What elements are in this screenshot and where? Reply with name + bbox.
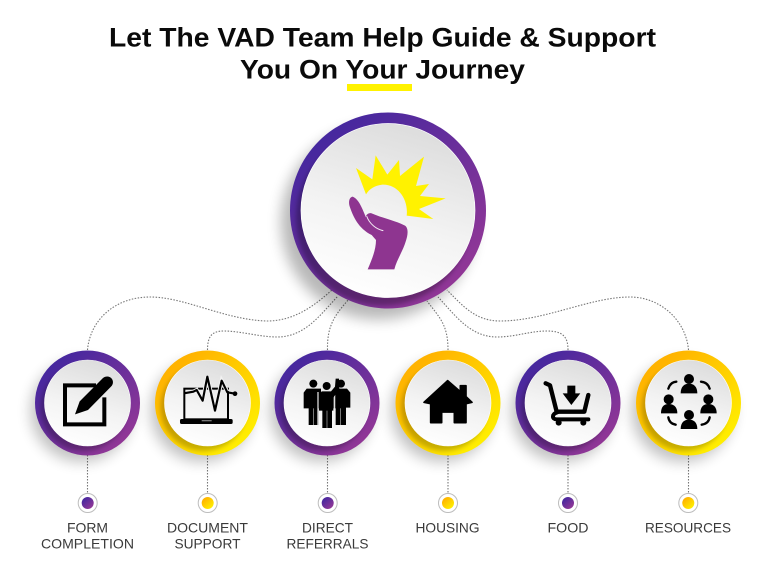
label: document support: SUPPORT xyxy=(174,535,241,551)
label: food: FOOD xyxy=(548,519,588,535)
label: direct referrals: DIRECT xyxy=(302,519,353,535)
title xyxy=(109,22,656,84)
label: form completion: COMPLETION xyxy=(41,535,134,551)
icon: laptop with pulse line xyxy=(180,377,237,424)
icon: hand holding sun xyxy=(349,155,446,269)
icon: shopping cart with down arrow xyxy=(546,383,588,426)
icon: house xyxy=(424,381,472,423)
badge: document support xyxy=(150,350,260,462)
icon: group of people xyxy=(304,379,350,428)
badge: resources xyxy=(632,350,741,462)
badge: housing xyxy=(391,350,500,462)
label: housing: HOUSING xyxy=(416,519,480,535)
label: form completion xyxy=(41,519,134,551)
badge: form completion xyxy=(30,350,140,462)
icon: circle of people xyxy=(661,374,717,429)
label: direct referrals: REFERRALS xyxy=(286,535,368,551)
label: document support: DOCUMENT xyxy=(167,519,248,535)
label: direct referrals xyxy=(286,519,368,551)
badge: direct referrals xyxy=(270,350,380,462)
title underline accent xyxy=(347,84,412,91)
marker dots xyxy=(78,494,698,512)
label: form completion: FORM xyxy=(67,519,108,535)
title: You On Your Journey xyxy=(240,54,525,84)
connector lines xyxy=(88,290,688,494)
main circle badge xyxy=(281,112,486,320)
title: Let The VAD Team Help Guide & Support xyxy=(109,22,656,52)
label: resources: RESOURCES xyxy=(645,519,731,535)
icon: form and pencil xyxy=(65,376,113,424)
badge: food xyxy=(511,350,620,462)
label: document support xyxy=(167,519,248,551)
